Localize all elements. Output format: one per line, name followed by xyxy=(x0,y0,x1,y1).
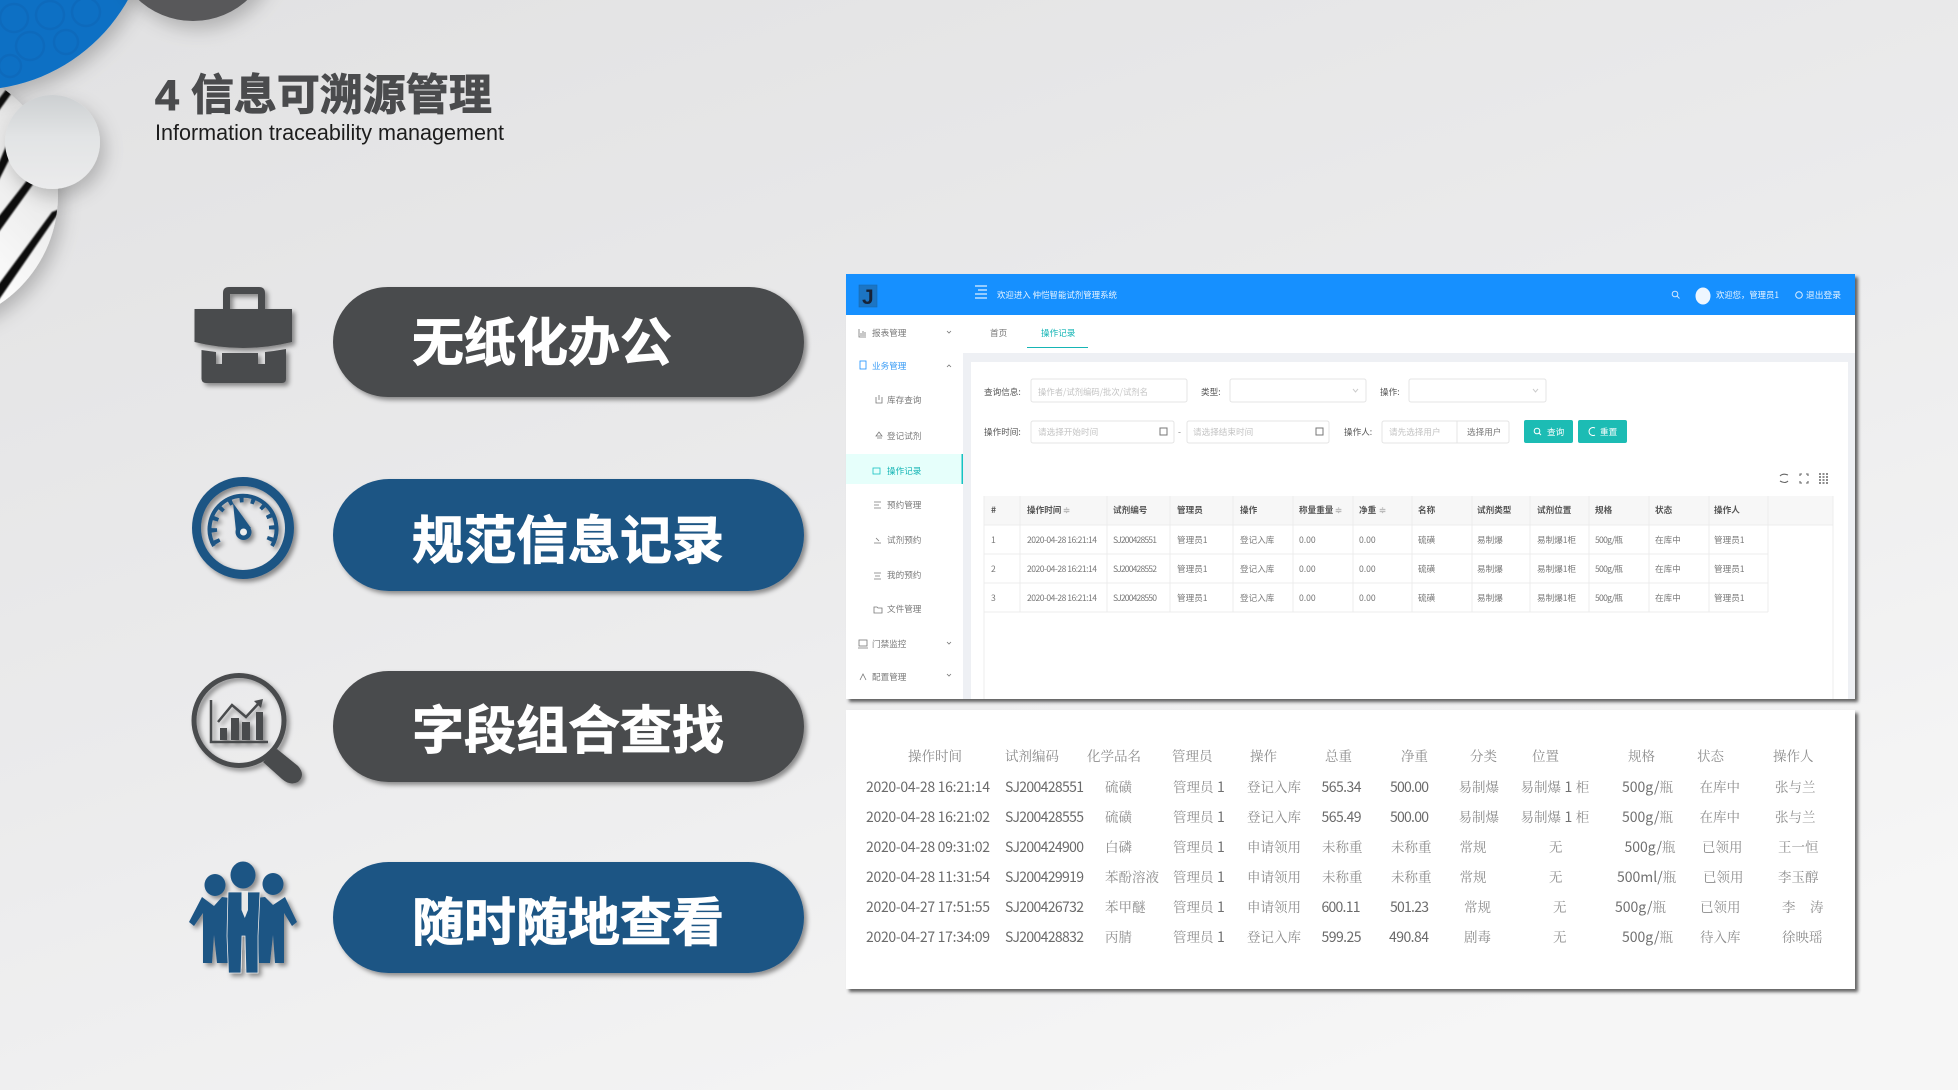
operation log table: SJ200428550 xyxy=(1113,592,1157,604)
table row 5: 501.23 xyxy=(1390,897,1429,917)
operation log table: 在库中 xyxy=(1655,592,1681,604)
sidebar: 操作记录 xyxy=(887,465,922,477)
table row 1: 2020-04-28 16:21:14 xyxy=(866,777,990,797)
operation log table: 0.00 xyxy=(1359,534,1376,546)
table row 6: 登记入库 xyxy=(1247,926,1301,946)
operation log table: 操作时间 xyxy=(1027,504,1062,516)
operation log table: 0.00 xyxy=(1299,534,1316,546)
operation log table: 易制爆 xyxy=(1477,592,1503,604)
operation log table: 状态 xyxy=(1655,504,1673,516)
table row 6 xyxy=(866,926,1822,947)
table row 1 xyxy=(866,776,1816,797)
table row 1: 易制爆 xyxy=(1458,776,1500,796)
panel: system screenshot xyxy=(846,274,1855,699)
filter form: 请选择开始时间 xyxy=(1038,426,1098,438)
icon: gauge xyxy=(196,482,290,574)
pill: paperless office: 无纸化办公 xyxy=(412,301,672,376)
operation log table: 易制爆1柜 xyxy=(1537,534,1577,546)
table row 1: 565.34 xyxy=(1322,777,1362,797)
table row 1: 登记入库 xyxy=(1247,776,1301,796)
table header row: 操作 xyxy=(1250,745,1278,765)
table row 3: 申请领用 xyxy=(1247,836,1301,856)
operation log table: 操作 xyxy=(1240,504,1258,516)
sidebar: 我的预约 xyxy=(887,569,921,581)
sidebar: 报表管理 xyxy=(872,327,907,339)
sidebar: 配置管理 xyxy=(872,671,907,683)
table row 4: 未称重 xyxy=(1391,866,1432,886)
operation log table: 试剂编号 xyxy=(1113,504,1148,516)
table row 6: 管理员 1 xyxy=(1173,926,1225,947)
operation log table: 净重 xyxy=(1359,504,1377,516)
table row 3: 未称重 xyxy=(1322,836,1362,856)
table row 3: 已领用 xyxy=(1702,836,1742,856)
table row 3: 500g/瓶 xyxy=(1624,836,1676,857)
operation log table: 登记入库 xyxy=(1240,563,1275,575)
operation log table: 登记入库 xyxy=(1240,534,1275,546)
filter form: 查询 xyxy=(1547,426,1565,438)
operation log table: 登记入库 xyxy=(1240,592,1275,604)
table row 5: 苯甲醚 xyxy=(1105,896,1146,916)
sidebar: 文件管理 xyxy=(887,603,922,615)
operation log table: 易制爆1柜 xyxy=(1537,592,1577,604)
table row 2: 硫磺 xyxy=(1105,806,1132,826)
icon: briefcase xyxy=(194,287,292,383)
table row 3: 常规 xyxy=(1460,836,1487,856)
table row 4: 已领用 xyxy=(1703,866,1744,886)
sidebar: 预约管理 xyxy=(887,499,922,511)
table row 6: SJ200428832 xyxy=(1005,927,1084,947)
table row 4: 申请领用 xyxy=(1247,866,1301,886)
filter form: 请选择结束时间 xyxy=(1193,426,1253,438)
operation log table: 管理员 xyxy=(1177,504,1203,516)
filter form: 重置 xyxy=(1600,426,1618,438)
operation log table: 名称 xyxy=(1418,504,1436,516)
table row 1: SJ200428551 xyxy=(1005,777,1084,797)
operation log table: 0.00 xyxy=(1359,563,1376,575)
table row 2: 500g/瓶 xyxy=(1622,806,1673,827)
operation log table: 500g/瓶 xyxy=(1595,563,1623,575)
table row 2: 管理员 1 xyxy=(1173,806,1225,827)
decoration: striped disc xyxy=(0,64,62,326)
decoration: blue circle xyxy=(0,0,150,90)
operation log table: 3 xyxy=(991,592,996,604)
table row 4: 500ml/瓶 xyxy=(1617,866,1677,887)
table header row: 净重 xyxy=(1401,745,1428,765)
pill: field search: 字段组合查找 xyxy=(412,689,724,764)
table row 2 xyxy=(866,806,1816,827)
filter form: 类型: xyxy=(1201,386,1221,398)
table row 3: 未称重 xyxy=(1391,836,1432,856)
table row 5: 500g/瓶 xyxy=(1615,896,1666,917)
operation log table: 管理员1 xyxy=(1177,592,1208,604)
operation log table: 500g/瓶 xyxy=(1595,592,1623,604)
table row 6: 丙腈 xyxy=(1105,926,1132,946)
pill: anytime viewing xyxy=(333,862,804,973)
operation log table: 规格 xyxy=(1595,504,1613,516)
operation log table: 操作人 xyxy=(1714,504,1740,516)
operation log table: 管理员1 xyxy=(1714,534,1745,546)
table header row: 管理员 xyxy=(1172,745,1214,765)
table row 5: 李 xyxy=(1782,896,1796,916)
operation log table: 硫磺 xyxy=(1418,563,1436,575)
table row 4: 无 xyxy=(1549,866,1562,886)
table row 5: 常规 xyxy=(1464,896,1492,916)
panel: reagent record table xyxy=(846,710,1855,989)
operation log table: 易制爆 xyxy=(1477,563,1503,575)
operation log table: 2 xyxy=(991,563,996,575)
operation log table: 2020-04-28 16:21:14 xyxy=(1027,534,1097,546)
pill: paperless office xyxy=(333,287,804,397)
table row 1: 500g/瓶 xyxy=(1622,776,1673,797)
table row 1: 在库中 xyxy=(1700,776,1740,796)
table row 2: 在库中 xyxy=(1700,806,1740,826)
table row 5: 管理员 1 xyxy=(1173,896,1225,917)
table row 3: 王一恒 xyxy=(1778,836,1819,856)
table row 5: SJ200426732 xyxy=(1005,897,1084,917)
operation log table: 硫磺 xyxy=(1418,592,1436,604)
table row 4: SJ200429919 xyxy=(1005,867,1084,887)
table row 3: 无 xyxy=(1549,836,1562,856)
table row 4: 苯酚溶液 xyxy=(1105,866,1159,886)
table row 6: 无 xyxy=(1553,926,1566,946)
table row 3: 白磷 xyxy=(1105,836,1132,856)
table row 5 xyxy=(866,896,1824,917)
operation log table xyxy=(984,496,1833,699)
table row 1: 管理员 1 xyxy=(1173,776,1225,797)
table row 3: SJ200424900 xyxy=(1005,837,1084,857)
pill: standard records: 规范信息记录 xyxy=(412,499,724,574)
table row 6: 剧毒 xyxy=(1464,926,1491,946)
operation log table: 2020-04-28 16:21:14 xyxy=(1027,563,1097,575)
filter form xyxy=(984,362,1855,699)
operation log table: 在库中 xyxy=(1655,534,1681,546)
top header bar: 退出登录 xyxy=(1806,289,1841,301)
pill: standard records xyxy=(333,479,804,591)
top header bar: 欢迎进入 仲恺智能试剂管理系统 xyxy=(997,289,1117,301)
operation log table: 称量重量 xyxy=(1299,504,1334,516)
table row 5: 申请领用 xyxy=(1247,896,1301,916)
filter form: 操作时间: xyxy=(984,426,1021,438)
filter form: 请先选择用户 xyxy=(1389,426,1441,438)
table header row: 分类 xyxy=(1470,745,1498,765)
table row 4: 常规 xyxy=(1460,866,1487,886)
table row 4 xyxy=(866,866,1819,887)
table row 6: 599.25 xyxy=(1322,927,1362,947)
table header row: 总重 xyxy=(1325,745,1352,765)
sidebar: 业务管理 xyxy=(872,360,907,372)
pill: anytime viewing: 随时随地查看 xyxy=(412,881,724,956)
table row 6: 500g/瓶 xyxy=(1622,926,1673,947)
operation log table: 0.00 xyxy=(1359,592,1376,604)
operation log table: 硫磺 xyxy=(1418,534,1436,546)
table row 2: 张与兰 xyxy=(1775,806,1816,826)
table header row: 操作时间 xyxy=(908,745,962,765)
operation log table: 500g/瓶 xyxy=(1595,534,1623,546)
operation log table: 2020-04-28 16:21:14 xyxy=(1027,592,1097,604)
operation log table: SJ200428552 xyxy=(1113,563,1157,575)
operation log table: 0.00 xyxy=(1299,592,1316,604)
operation log table: 管理员1 xyxy=(1714,592,1745,604)
table row 5: 已领用 xyxy=(1700,896,1740,916)
table row 1: 张与兰 xyxy=(1775,776,1816,796)
table row 4: 2020-04-28 11:31:54 xyxy=(866,867,990,887)
table row 5: 2020-04-27 17:51:55 xyxy=(866,897,990,917)
table row 6: 2020-04-27 17:34:09 xyxy=(866,927,990,947)
filter form: 选择用户 xyxy=(1467,426,1501,438)
sidebar: 库存查询 xyxy=(887,394,922,406)
table header row: 规格 xyxy=(1628,745,1656,765)
icon: people xyxy=(189,862,297,973)
table row 3: 管理员 1 xyxy=(1173,836,1225,857)
sidebar: 门禁监控 xyxy=(872,638,907,650)
table row 3 xyxy=(866,836,1819,857)
table row 4: 李玉醇 xyxy=(1778,866,1819,886)
decoration: light disc xyxy=(5,95,100,189)
table row 5: 600.11 xyxy=(1322,897,1360,917)
operation log table: 管理员1 xyxy=(1177,534,1208,546)
operation log table: 在库中 xyxy=(1655,563,1681,575)
table header row: 状态 xyxy=(1697,745,1724,765)
table row 2: SJ200428555 xyxy=(1005,807,1084,827)
table row 1: 硫磺 xyxy=(1105,776,1132,796)
tab bar xyxy=(963,315,1855,362)
table row 4: 管理员 1 xyxy=(1173,866,1225,887)
filter form: 查询信息: xyxy=(984,386,1021,398)
filter form: - xyxy=(1178,426,1181,438)
subtitle: Information traceability management xyxy=(155,120,504,145)
table header row: 化学品名 xyxy=(1087,745,1141,765)
operation log table: 试剂位置 xyxy=(1537,504,1572,516)
operation log table: 0.00 xyxy=(1299,563,1316,575)
operation log table: ≑ xyxy=(1379,504,1386,516)
table header row: 操作人 xyxy=(1773,745,1814,765)
top header bar: J xyxy=(862,286,874,309)
sidebar: 登记试剂 xyxy=(887,430,921,442)
table row 2: 易制爆 xyxy=(1458,806,1500,826)
table row 2: 登记入库 xyxy=(1247,806,1301,826)
table row 5: 涛 xyxy=(1810,896,1824,916)
operation log table: 易制爆1柜 xyxy=(1537,563,1577,575)
pill: field search xyxy=(333,671,804,782)
operation log table: 管理员1 xyxy=(1177,563,1208,575)
filter form: 操作: xyxy=(1380,386,1400,398)
operation log table: 管理员1 xyxy=(1714,563,1745,575)
top header bar: 欢迎您，管理员1 xyxy=(1716,289,1779,301)
decoration: gray circle xyxy=(112,0,274,21)
table row 6: 徐映瑶 xyxy=(1782,926,1822,946)
sidebar: 试剂预约 xyxy=(887,534,921,546)
operation log table: ≑ xyxy=(1063,504,1070,516)
table row 6: 待入库 xyxy=(1700,926,1741,946)
operation log table: SJ200428551 xyxy=(1113,534,1157,546)
title: 4 信息可溯源管理 xyxy=(155,72,492,120)
table row 2: 2020-04-28 16:21:02 xyxy=(866,807,990,827)
table row 2: 565.49 xyxy=(1322,807,1362,827)
table toolbar icons xyxy=(1780,474,1828,483)
filter form: 操作人: xyxy=(1344,426,1372,438)
sidebar xyxy=(846,315,971,699)
operation log table: 1 xyxy=(991,534,996,546)
table header row: 试剂编码 xyxy=(1005,745,1059,765)
top header bar xyxy=(846,274,1855,315)
tab bar: 操作记录 xyxy=(1041,327,1076,339)
tab bar: 首页 xyxy=(990,327,1008,339)
table header row xyxy=(908,745,1814,765)
table row 6: 490.84 xyxy=(1389,927,1429,947)
operation log table: 试剂类型 xyxy=(1477,504,1512,516)
table row 1: 易制爆 1 柜 xyxy=(1520,776,1590,797)
operation log table: ≑ xyxy=(1335,504,1342,516)
table header row: 位置 xyxy=(1532,745,1559,765)
table row 2: 500.00 xyxy=(1390,807,1429,827)
operation log table: 易制爆 xyxy=(1477,534,1503,546)
filter form: 操作者/试剂编码/批次/试剂名 xyxy=(1038,386,1148,398)
operation log table: # xyxy=(991,504,996,516)
table row 4: 未称重 xyxy=(1322,866,1362,886)
table row 5: 无 xyxy=(1553,896,1566,916)
table row 1: 500.00 xyxy=(1390,777,1429,797)
icon: magnifier chart xyxy=(194,676,302,783)
table row 2: 易制爆 1 柜 xyxy=(1520,806,1590,827)
table row 3: 2020-04-28 09:31:02 xyxy=(866,837,990,857)
